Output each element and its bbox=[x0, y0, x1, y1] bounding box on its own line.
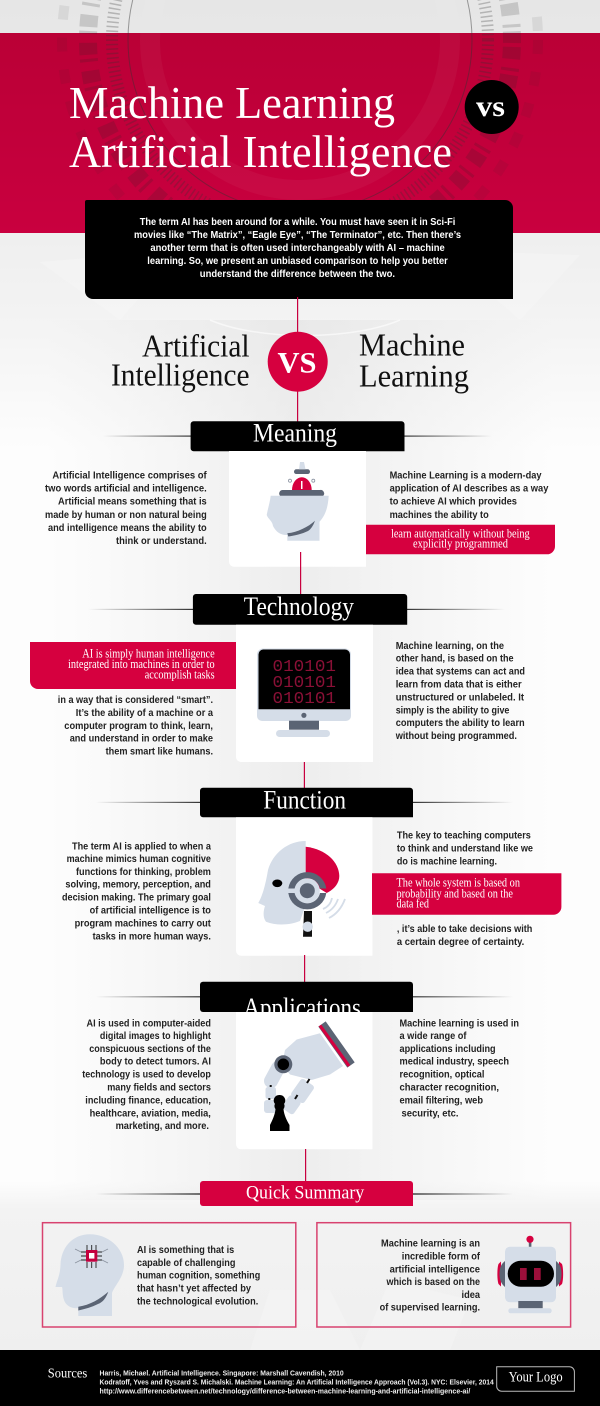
function callout: The whole system is based on bbox=[396, 876, 521, 890]
function right text: The key to teaching computers bbox=[397, 831, 531, 842]
footer bbox=[0, 1350, 600, 1406]
icon: head with chip bbox=[56, 1234, 124, 1316]
comparison heading: machine learning: Learning bbox=[359, 358, 469, 394]
technology right text: computers the ability to learn bbox=[396, 718, 525, 729]
meaning left text: and intelligence means the ability to bbox=[48, 523, 207, 534]
section: quick summary bbox=[42, 1181, 571, 1327]
function left text bbox=[62, 841, 211, 942]
applications right text: applications including bbox=[400, 1044, 496, 1055]
technology callout: integrated into machines in order to bbox=[68, 657, 215, 671]
intro panel: learning. So, we present an unbiased comparison to help you better bbox=[147, 256, 448, 267]
applications right text: a wide range of bbox=[400, 1031, 467, 1042]
technology right text: Machine learning, on the bbox=[396, 641, 504, 652]
AI summary text: that hasn’t yet affected by bbox=[137, 1284, 251, 1295]
function left text: functions for thinking, problem bbox=[76, 867, 211, 878]
comparison badge: VS: VS bbox=[278, 347, 316, 380]
badge: vs: vs bbox=[476, 90, 505, 123]
applications left text: AI is used in computer-aided bbox=[86, 1018, 211, 1029]
summary header bar: Quick Summary bbox=[246, 1182, 365, 1203]
comparison heading: machine learning bbox=[359, 327, 469, 394]
meaning right text: application of AI describes as a way bbox=[390, 484, 549, 495]
meaning right text: Machine Learning is a modern-day bbox=[390, 471, 542, 482]
connector line bbox=[300, 552, 301, 595]
function left text: The term AI is applied to when a bbox=[72, 841, 211, 852]
function white card bbox=[236, 817, 372, 956]
technology right text: without being programmed. bbox=[395, 731, 517, 742]
applications header bar bbox=[200, 982, 413, 1022]
meaning left text: think or understand. bbox=[116, 536, 207, 547]
function right text continued bbox=[397, 924, 532, 948]
source references: Kodratoff, Yves and Ryszard S. Michalski. Machine Learning: An Artificial Intelligence Approach (Vol.3). NYC: Elsevier, 2014 bbox=[100, 1378, 494, 1387]
icon: half robot head bbox=[258, 841, 345, 937]
icon: computer monitor: 010101 bbox=[272, 658, 336, 677]
technology callout: accomplish tasks bbox=[145, 667, 215, 681]
meaning left text: Artificial means something that is bbox=[58, 497, 207, 508]
comparison heading: artificial intelligence: Artificial bbox=[142, 328, 250, 364]
machine learning summary text: idea bbox=[462, 1290, 480, 1301]
machine learning summary text: Machine learning is an bbox=[381, 1238, 480, 1249]
connector line bbox=[297, 297, 298, 422]
meaning right text bbox=[390, 471, 549, 521]
function callout: data fed bbox=[396, 897, 430, 911]
icon: computer monitor: 010101 bbox=[272, 674, 336, 693]
applications side rules bbox=[96, 996, 513, 997]
logo placeholder bbox=[497, 1367, 574, 1391]
function left text: machine mimics human cognitive bbox=[67, 854, 211, 865]
meaning white card bbox=[229, 451, 366, 567]
technology right text: other hand, is based on the bbox=[396, 654, 514, 665]
comparison badge: VS bbox=[268, 332, 328, 392]
section: function bbox=[62, 785, 561, 956]
comparison heading: artificial intelligence: Intelligence bbox=[111, 357, 250, 393]
meaning header bar bbox=[191, 419, 404, 451]
function right text continued: a certain degree of certainty. bbox=[397, 937, 524, 948]
applications left text: marketing, and more. bbox=[116, 1121, 209, 1132]
meaning callout: learn automatically without being bbox=[391, 526, 530, 540]
technology left text: and understand in order to make bbox=[70, 733, 213, 744]
applications left text: conspicuous sections of the bbox=[89, 1044, 211, 1055]
machine learning summary text: incredible form of bbox=[402, 1251, 480, 1262]
function right text bbox=[397, 831, 533, 868]
panel: AI summary bbox=[42, 1223, 296, 1327]
applications left text: including finance, education, bbox=[85, 1095, 211, 1106]
badge: vs bbox=[465, 80, 519, 134]
title: Machine Learning bbox=[69, 77, 395, 128]
applications right text: character recognition, bbox=[400, 1082, 499, 1093]
header tech ring decoration bbox=[57, 0, 543, 200]
connector line bbox=[304, 762, 305, 788]
source references: http://www.differencebetween.net/technology/difference-between-machine-learning-and-artificial-intelligence-ai/ bbox=[100, 1387, 471, 1396]
meaning right text: to achieve AI which provides bbox=[390, 497, 517, 508]
meaning left text: two words artificial and intelligence. bbox=[45, 484, 207, 495]
technology right text: learn from data that is either bbox=[396, 680, 522, 691]
technology side rules bbox=[88, 609, 505, 610]
technology callout: AI is simply human intelligence bbox=[82, 647, 215, 661]
logo placeholder: Your Logo bbox=[509, 1370, 563, 1386]
source references bbox=[100, 1368, 494, 1396]
applications right text: security, etc. bbox=[402, 1108, 459, 1119]
function right text: do is machine learning. bbox=[397, 857, 497, 868]
technology left text: computer program to think, learn, bbox=[64, 721, 213, 732]
function left text: program machines to carry out bbox=[75, 918, 211, 929]
technology white card bbox=[236, 625, 373, 762]
summary header bar bbox=[200, 1181, 413, 1206]
function callout: probability and based on the bbox=[396, 886, 513, 900]
applications left text: technology is used to develop bbox=[82, 1070, 211, 1081]
technology right text: unstructured or unlabeled. It bbox=[396, 692, 524, 703]
meaning side rules bbox=[103, 436, 492, 437]
intro panel: movies like “The Matrix”, “Eagle Eye”, “The Terminator”, etc. Then there’s bbox=[134, 230, 461, 241]
function left text: solving, memory, perception, and bbox=[65, 880, 211, 891]
icon: head with bot bbox=[267, 462, 329, 541]
function header bar bbox=[200, 785, 413, 817]
meaning right text: machines the ability to bbox=[390, 510, 489, 521]
icon: robot head bbox=[497, 1236, 563, 1313]
AI summary text: capable of challenging bbox=[137, 1258, 235, 1269]
technology left text: It’s the ability of a machine or a bbox=[76, 708, 213, 719]
source references: Harris, Michael. Artificial Intelligence. Singapore: Marshall Cavendish, 2010 bbox=[100, 1368, 344, 1377]
connector line bbox=[304, 955, 305, 982]
function left text: tasks in more human ways. bbox=[93, 931, 211, 942]
function left text: of artificial intelligence is to bbox=[90, 906, 211, 917]
technology left text bbox=[58, 695, 213, 757]
technology right text: idea that systems can act and bbox=[396, 667, 525, 678]
meaning left text bbox=[45, 471, 207, 547]
technology left text: in a way that is considered “smart”. bbox=[58, 695, 213, 706]
applications left text bbox=[82, 1018, 211, 1132]
function right text: to think and understand like we bbox=[397, 844, 533, 855]
technology header bar: Technology bbox=[244, 592, 354, 621]
comparison heading: artificial intelligence bbox=[111, 328, 250, 393]
meaning left text: Artificial Intelligence comprises of bbox=[52, 471, 207, 482]
section: meaning bbox=[45, 419, 555, 567]
AI summary text: human cognition, something bbox=[137, 1270, 260, 1281]
sources label: Sources bbox=[48, 1365, 87, 1380]
machine learning summary text: which is based on the bbox=[386, 1277, 480, 1288]
icon: robot arm with chess pawn bbox=[264, 1024, 351, 1131]
applications right text: medical industry, speech bbox=[400, 1057, 509, 1068]
summary side rules bbox=[96, 1193, 513, 1195]
function side rules bbox=[96, 802, 513, 803]
intro panel: another term that is often used interchangeably with AI – machine bbox=[150, 243, 445, 254]
machine learning summary text: artificial intelligence bbox=[390, 1264, 480, 1275]
section: applications bbox=[82, 982, 519, 1149]
meaning callout: explicitly programmed bbox=[413, 536, 509, 550]
meaning left text: made by human or non natural being bbox=[45, 510, 207, 521]
meaning header bar: Meaning bbox=[253, 419, 337, 448]
function header bar: Function bbox=[263, 785, 346, 814]
technology right text bbox=[395, 641, 525, 742]
icon: computer monitor: 010101 bbox=[272, 690, 336, 709]
applications white card bbox=[236, 1012, 372, 1149]
intro panel: understand the difference between the two. bbox=[200, 269, 395, 280]
icon: computer monitor bbox=[257, 648, 351, 737]
applications right text: Machine learning is used in bbox=[400, 1018, 519, 1029]
section: technology bbox=[30, 592, 525, 762]
applications left text: healthcare, aviation, media, bbox=[90, 1108, 211, 1119]
technology right text: simply is the ability to give bbox=[396, 705, 510, 716]
meaning callout bbox=[366, 525, 555, 554]
title: Artificial Intelligence bbox=[69, 126, 452, 177]
applications left text: body to detect tumors. AI bbox=[100, 1057, 211, 1068]
applications left text: digital images to highlight bbox=[100, 1031, 211, 1042]
function left text: decision making. The primary goal bbox=[62, 893, 211, 904]
machine learning summary text: of supervised learning. bbox=[380, 1303, 480, 1314]
applications right text bbox=[400, 1018, 519, 1119]
applications header bar: Applications bbox=[243, 993, 361, 1022]
applications right text: email filtering, web bbox=[400, 1095, 483, 1106]
AI summary text: AI is something that is bbox=[137, 1245, 234, 1256]
technology left text: them smart like humans. bbox=[106, 746, 213, 757]
technology header bar bbox=[193, 592, 407, 625]
technology callout bbox=[30, 642, 236, 689]
comparison heading: machine learning: Machine bbox=[359, 327, 465, 363]
AI summary text: the technological evolution. bbox=[137, 1296, 258, 1307]
function callout bbox=[372, 873, 561, 915]
title bbox=[69, 77, 452, 177]
panel: machine learning summary bbox=[317, 1223, 571, 1327]
applications right text: recognition, optical bbox=[400, 1070, 485, 1081]
connector line bbox=[305, 1149, 306, 1182]
applications left text: many fields and sectors bbox=[107, 1082, 211, 1093]
machine learning summary text bbox=[380, 1238, 480, 1314]
intro panel bbox=[85, 200, 513, 299]
header red band bbox=[0, 33, 600, 233]
intro panel: The term AI has been around for a while. You must have seen it in Sci-Fi bbox=[140, 217, 456, 228]
function right text continued: , it’s able to take decisions with bbox=[397, 924, 532, 935]
AI summary text bbox=[137, 1245, 260, 1307]
